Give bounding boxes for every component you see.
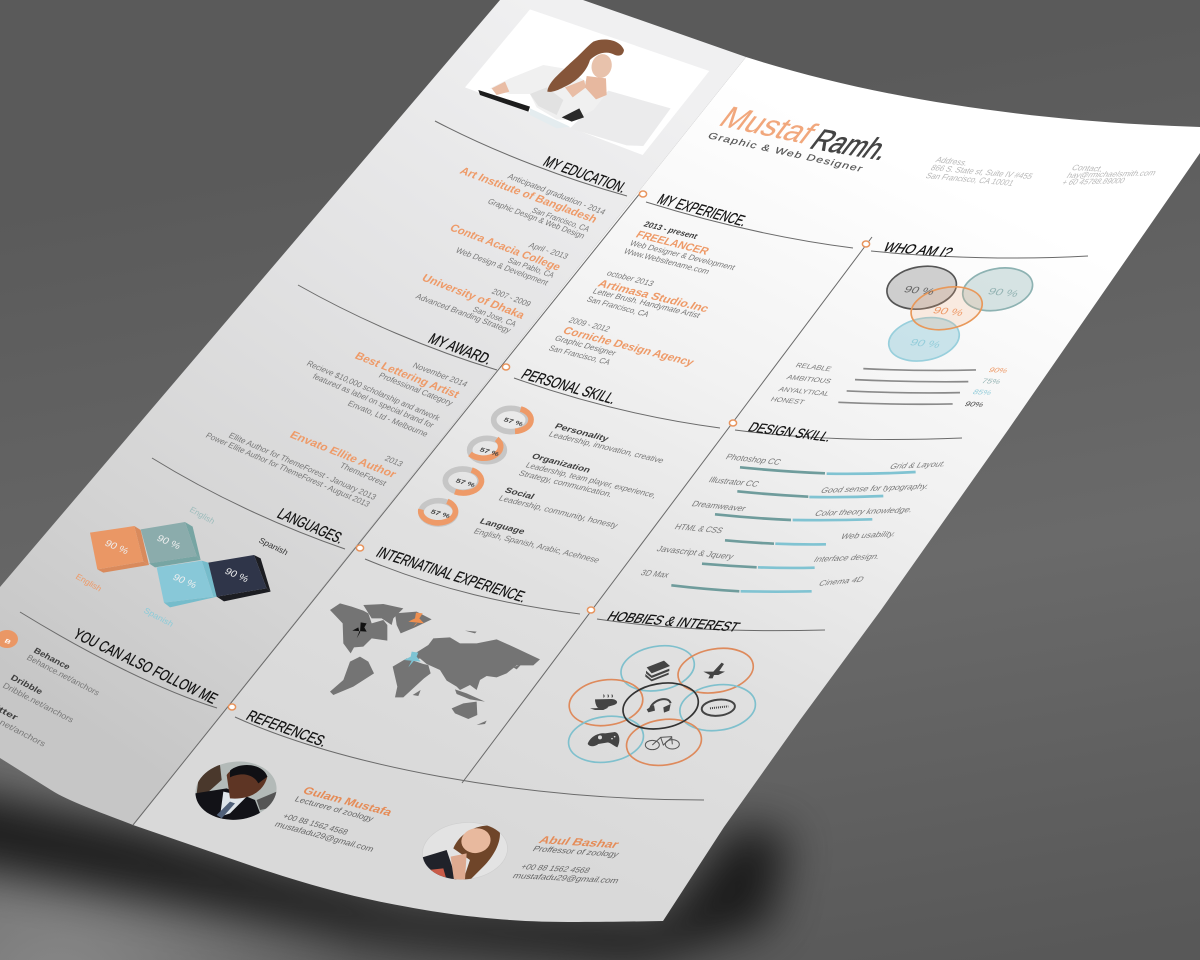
panel: who am i: 90 % [931,305,966,318]
laptop [570,91,671,146]
panel: languages: Spanish [257,536,290,557]
panel: languages: English [74,572,103,594]
panel: design skill: Color theory knowledge. [813,506,915,518]
heading: PERSONAL SKILL. [518,366,620,408]
contact block [1060,164,1158,187]
panel: personal skill: 57 % [454,477,477,489]
panel: design skill: Cinema 4D [817,576,865,588]
panel: experience: San Francisco, CA [547,344,612,367]
panel: award: Power Ellite Author for ThemeForest - August 2013 [204,432,372,509]
panel: experience: FREELANCER [634,229,712,257]
panel: experience [547,191,751,368]
panel: experience: Letter Brush. Handymate Artist [591,287,702,320]
panel: languages: 90 % [155,534,182,551]
panel: references: Lecturere of zoology [293,795,376,824]
heading: HOBBIES & INTEREST [604,608,743,635]
panel: award: Recieve $10,000 scholarship and artwork [305,360,442,423]
panel: who am i: HONEST [769,395,806,406]
hobby rings [566,640,758,770]
panel: references: mustafadu29@gmail.com [511,872,621,885]
job title: Graphic & Web Designer [706,131,865,174]
panel: personal skill: Strategy, communication. [517,469,614,499]
panel: experience: october 2013 [605,269,656,288]
panel: who am i: 85% [971,388,994,396]
panel: award: 2013 [383,455,405,469]
icon: gamepad [588,732,619,747]
panel: who am i: 90 % [902,284,937,297]
panel: references: Proffessor of zoology [531,845,621,859]
panel: design skill: Grid & Layout. [888,460,948,471]
name last: Ramh. [803,123,900,166]
panel: personal skill: Leadership, community, honesty [497,494,620,530]
panel: education [414,154,630,335]
panel: languages: English [188,505,216,526]
panel: who am i: RELABLE [794,361,834,373]
panel: experience: Web Designer & Development [628,239,737,272]
panel: experience: Www.Websitename.com [622,247,711,276]
panel: education: Web Design & Development [454,247,550,288]
panel: award [204,331,496,509]
panel: who am i: 75% [980,377,1003,385]
panel: who am i: AMBITIOUS [785,373,834,385]
panel: award: Envato, Ltd - Melbourne [346,400,430,439]
text: first reference: Gulam Mustafa [301,785,395,818]
shirt [490,65,607,121]
panel: personal skill: Organization [530,452,592,475]
panel: award: featured as label on special brand for [311,373,436,430]
heading: MY EXPERIENCE. [654,191,751,230]
panel: award: Best Lettering Artist [353,350,462,400]
panel: education: 2007 - 2009 [490,288,533,309]
heading: INTERNATINAL EXPERIENCE. [373,544,531,606]
panel: references: +00 88 1562 4568 [519,863,592,875]
panel: experience: Corniche Design Agency [561,325,697,368]
profile photo [465,9,709,155]
address block: San Francisco, CA 10001 [924,172,1015,188]
contact block: Contact. [1070,164,1105,174]
name first: Mustaf [712,100,825,150]
panel: who am i [769,239,1036,408]
panel: personal skill: 57 % [478,446,501,458]
panel: personal skill: Leadership, team player, experience, [524,461,658,500]
panel: award: Ellite Author for ThemeForest - January 2013 [227,432,378,502]
panel: who am i: ANYALYTICAL [777,385,831,397]
panel: design skill: Web usability. [839,530,898,541]
donut charts [421,408,531,524]
icon: football [701,698,736,717]
heading: WHO AM I? [880,239,956,260]
panel: international experience [330,544,540,725]
panel: experience: San Francisco, CA [585,295,651,319]
panel: follow me: Behance.net/anchors [25,654,101,698]
panel: experience: Graphic Designer [553,334,618,358]
text: second reference: Abul Bashar [537,833,622,850]
language blocks [90,522,271,607]
panel: follow me: Behance [32,647,72,672]
panel: education: Anticipated graduation - 2014 [506,173,607,217]
panel: languages: Spanish [142,606,175,629]
paper shadow [0,770,790,960]
panel: award: November 2014 [411,362,469,389]
hair [547,40,624,92]
icon: headphones [647,699,671,713]
panel: education: Art Institute of Bangladesh [458,165,600,225]
panel: personal skill [421,366,666,565]
face [589,52,614,80]
panel: education: April - 2013 [527,242,570,261]
timeline nodes [228,191,870,710]
panel: award: Professional Category [377,372,455,408]
panel: design skill: Interface design. [812,553,882,564]
panel: personal skill: English, Spanish, Arabic, Acehnese [472,527,601,565]
panel: award: ThemeForest [338,462,388,488]
heading: YOU CAN ALSO FOLLOW ME [70,626,221,708]
icon: bicycle [645,737,679,750]
icon: books [645,661,670,681]
panel: languages: 90 % [103,539,130,556]
venn diagram [884,261,1036,367]
panel: follow me: Dribble [9,674,44,697]
panel: design skill: HTML & CSS [673,523,725,535]
panel: languages [74,505,347,629]
panel: experience: 2009 - 2012 [567,316,612,334]
panel: experience: Artimasa Studio.Inc [596,278,712,315]
panel: personal skill: Social [503,486,536,501]
address block [924,156,1034,188]
panel: who am i: 90 % [986,286,1021,299]
timeline lines [20,121,1088,825]
panel: education: San Jose, CA [471,306,518,329]
panel: follow me [0,626,221,749]
heading: DESIGN SKILL. [745,419,836,445]
icon: behance badge [0,630,18,648]
panel: education: San Francisco, CA [530,207,591,234]
address block: Address. [934,156,969,168]
panel: personal skill: 57 % [429,508,452,520]
heading: MY EDUCATION. [540,154,630,196]
world map [330,603,540,725]
panel: experience: 2013 - present [642,220,700,241]
panel: personal skill: Language [478,517,527,536]
photo: woman [422,822,508,880]
icon: plane [703,663,725,678]
panel: hobbies [566,608,758,770]
panel: design skill [639,419,948,592]
address block: 866 S. State st, Suite IV #455 [929,164,1034,181]
panel: education: Contra Acacia College [448,222,564,273]
panel: who am i: 90% [987,366,1010,374]
panel: education: San Pablo, CA [506,257,556,280]
panel: personal skill: Personality [553,422,611,444]
panel: languages: 90 % [223,567,250,584]
trait bars [838,369,976,404]
panel: follow me: B [3,638,12,646]
panel: education: University of Dhaka [420,272,528,321]
panel: award: Envato Ellite Author [288,429,399,480]
panel: who am i: 90% [963,400,986,408]
panel: design skill: Javascript & Jquery [655,545,736,562]
panel: design skill: Good sense for typography. [819,483,931,495]
panel: references: mustafadu29@gmail.com [273,820,375,854]
panel: design skill: 3D Max [639,569,671,580]
panel: design skill: Illustrator CC [707,476,761,489]
contact block: + 60 45788.89000 [1060,177,1127,187]
icon: coffee cup [590,695,617,710]
panel: personal skill: 57 % [502,416,525,428]
name block [706,100,900,174]
panel: education: Advanced Branding Strategy [414,293,513,335]
panel: follow me: Dribble.net/anchors [1,682,75,725]
heading: LANGUAGES. [274,506,347,547]
photo: man [195,762,276,820]
heading: REFERENCES. [243,708,331,750]
panel: personal skill: Leadership, innovation, creative [547,430,666,465]
contact block: hay@rmichaelsmith.com [1065,169,1158,180]
hand [492,82,509,95]
heading: MY AWARD. [425,331,496,368]
panel: design skill: Photoshop CC [724,453,783,467]
panel: references: +00 88 1562 4568 [281,812,350,837]
panel: design skill: Dreamweaver [690,500,748,514]
panel: left grey column [0,0,746,825]
map pins [352,613,424,667]
panel: references [193,708,622,885]
skill bars [671,467,916,592]
tablet [478,90,530,112]
panel: languages: 90 % [171,573,198,590]
panel: who am i: 90 % [908,337,943,350]
panel: education: Graphic Design & Web Design [486,198,586,241]
